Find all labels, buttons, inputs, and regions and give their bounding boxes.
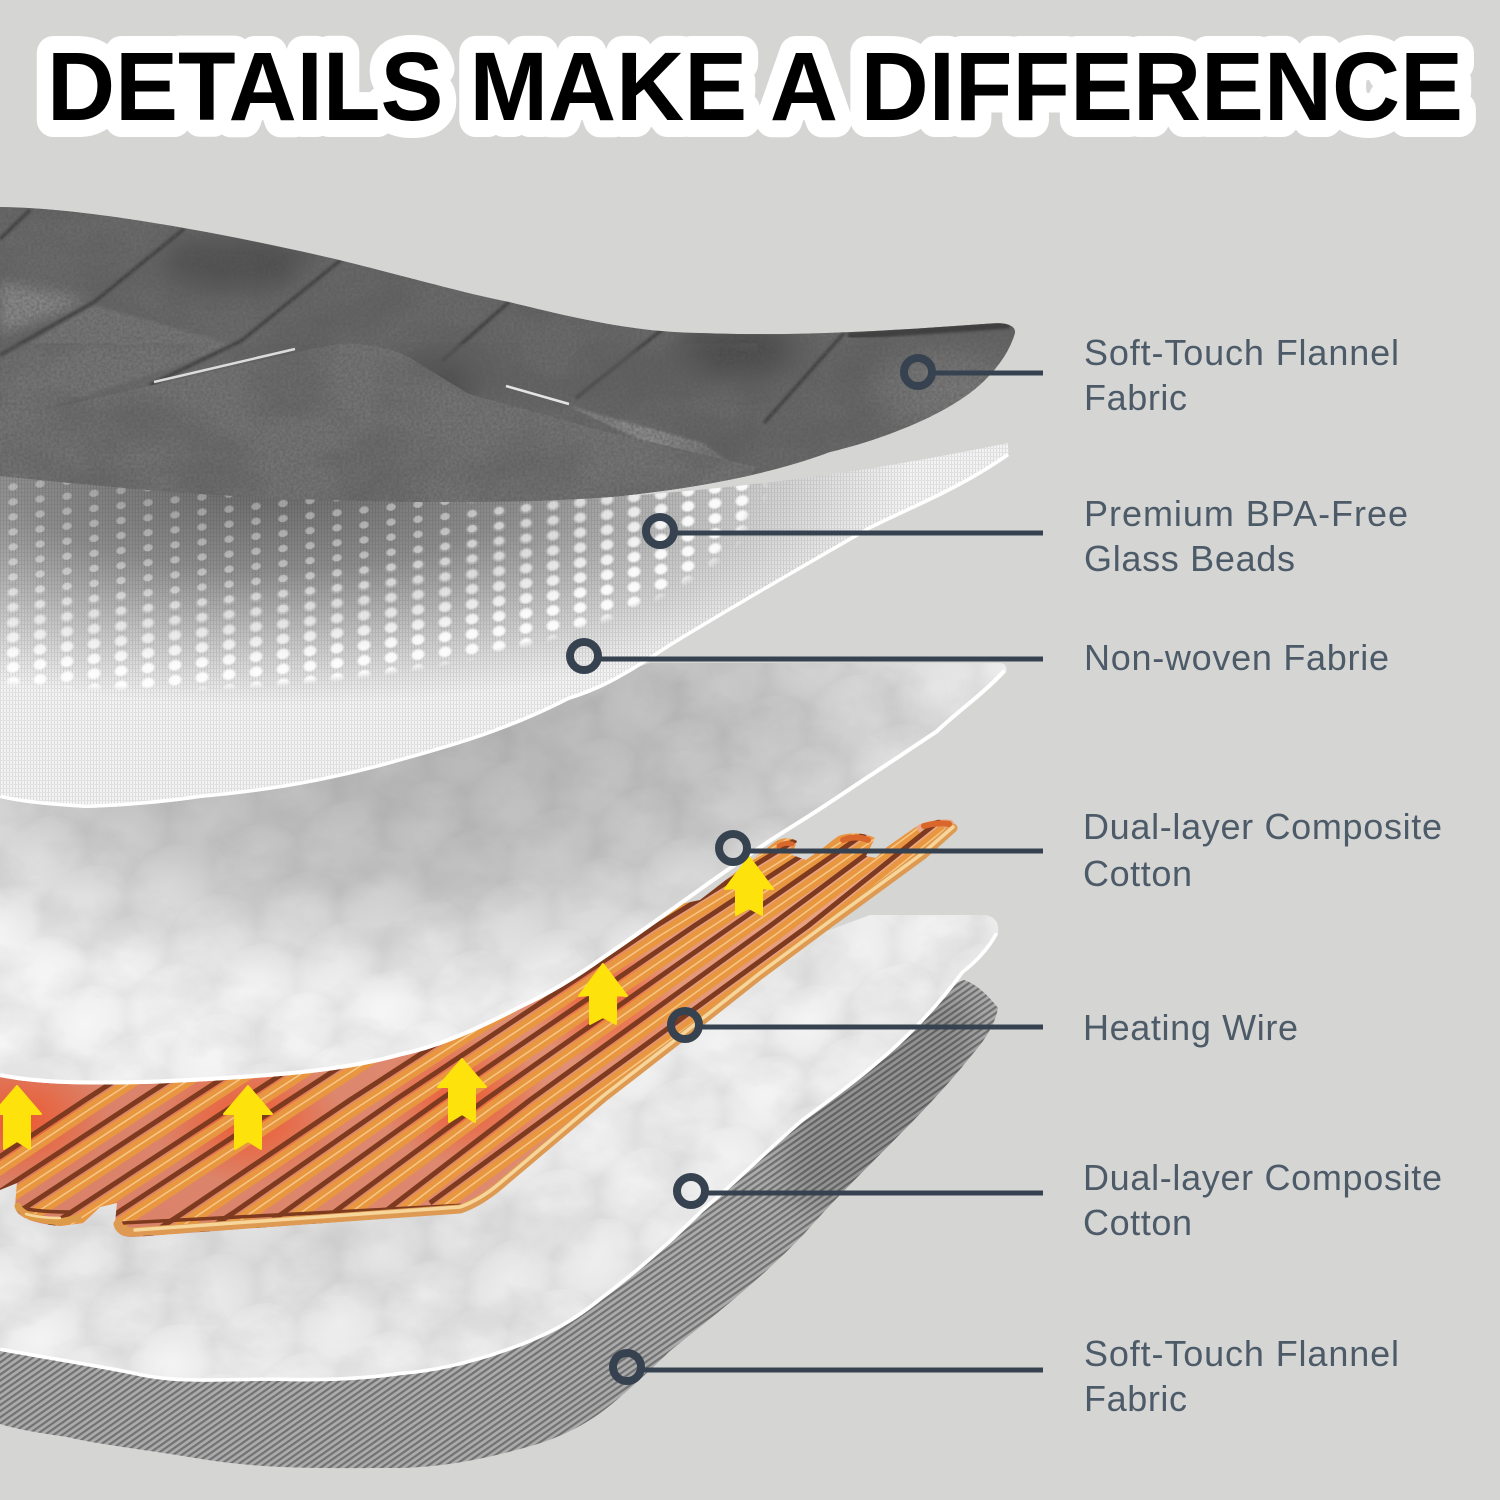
marker [671,1011,1043,1039]
heating wire ribs [0,820,954,1237]
arrow 1 [725,857,773,915]
label: Soft-Touch Flannel [1084,1333,1399,1374]
callout: heating wire [671,1007,1298,1048]
label: Cotton [1083,853,1192,894]
callout: lower composite cotton [677,1157,1442,1243]
title: DETAILS MAKE A DIFFERENCE [47,32,1463,141]
heat arrows [0,857,773,1149]
layer 6: lower composite cotton [0,900,1010,1390]
arrow 3 [438,1059,486,1122]
layer 4: upper composite cotton [0,650,1010,1090]
label: Non-woven Fabrie [1084,637,1389,678]
marker [677,1177,1043,1205]
arrow 4 [224,1086,272,1149]
marker [719,834,1043,862]
label: Dual-layer Composite [1083,806,1442,847]
front flap [0,344,756,502]
marker [904,358,1043,386]
label: Premium BPA-Free [1084,493,1408,534]
title: DETAILS MAKE A DIFFERENCE [47,32,1463,141]
label: Fabric [1084,1378,1187,1419]
arrow 5 [0,1086,41,1149]
label: Glass Beads [1084,538,1295,579]
marker [613,1353,1043,1381]
label: Soft-Touch Flannel [1084,332,1399,373]
label: Cotton [1083,1202,1192,1243]
label: Heating Wire [1083,1007,1298,1048]
layer 2: glass beads [6,480,767,690]
layer 1: top flannel fabric [0,200,1020,520]
quilted seams [0,210,844,423]
arrow 2 [579,964,627,1024]
callout: soft-touch flannel fabric (bottom) [613,1333,1399,1419]
callout: soft-touch flannel fabric (top) [904,332,1399,418]
callout: glass beads [646,493,1408,579]
layer 5: heating wire [0,820,958,1237]
layer 3: non-woven fabric and glass beads sheet [0,440,1010,810]
callout: non-woven fabric [570,637,1389,678]
callout: upper composite cotton [719,806,1442,894]
marker [570,642,1043,670]
heating wire gold border [17,823,953,1232]
marker [646,517,1043,545]
label: Fabric [1084,377,1187,418]
panel: layer stack illustration [0,200,1020,1480]
layer 7: bottom flannel fabric [0,960,1010,1480]
label: Dual-layer Composite [1083,1157,1442,1198]
